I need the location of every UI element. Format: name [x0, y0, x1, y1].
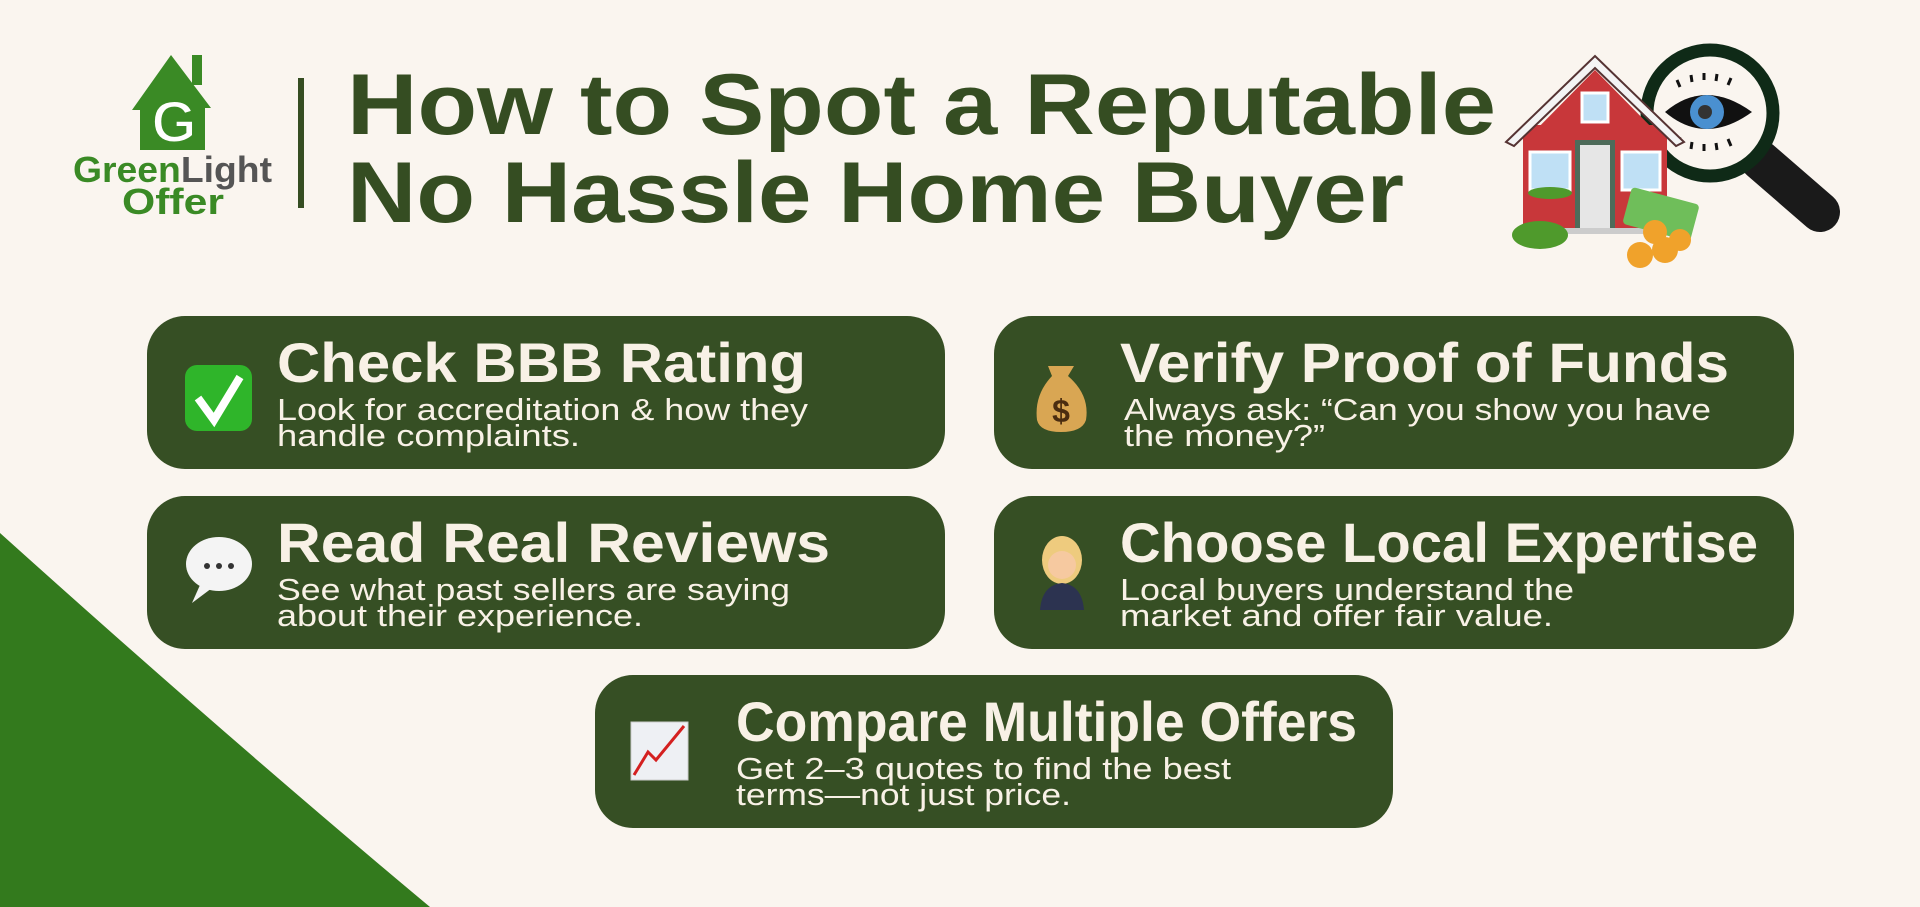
icon: woman: [1040, 536, 1084, 610]
title: How to Spot a Reputable: [347, 57, 1496, 153]
logo: GreenLight: [73, 149, 272, 190]
card: Compare Multiple Offers: Get 2–3 quotes to find the best: [736, 751, 1231, 786]
logo: Offer: [122, 181, 224, 222]
icon: money bag: $: [1052, 393, 1070, 429]
card: Check BBB Rating: Check BBB Rating: [277, 331, 806, 394]
card: Choose Local Expertise: Local buyers understand the: [1120, 572, 1574, 607]
card: Check BBB Rating: handle complaints.: [277, 418, 580, 453]
card: Read Real Reviews: about their experience.: [277, 598, 643, 633]
title: [347, 57, 1496, 241]
illustration: house with magnifier and money: [1506, 50, 1820, 268]
card: Verify Proof of Funds: [994, 316, 1794, 469]
icon: money bag: [1037, 366, 1087, 432]
logo: [73, 55, 272, 222]
card: Verify Proof of Funds: the money?”: [1124, 418, 1325, 453]
icon: speech bubble: [186, 537, 252, 603]
card: Verify Proof of Funds: Always ask: “Can you show you have: [1124, 392, 1711, 427]
card: Read Real Reviews: Read Real Reviews: [277, 511, 830, 574]
card: Verify Proof of Funds: Verify Proof of Funds: [1120, 331, 1729, 394]
title: No Hassle Home Buyer: [347, 145, 1404, 241]
logo: G: [151, 90, 197, 155]
card: Compare Multiple Offers: Compare Multiple Offers: [736, 690, 1357, 753]
card: Choose Local Expertise: market and offer fair value.: [1120, 598, 1553, 633]
card: Choose Local Expertise: Choose Local Expertise: [1120, 511, 1758, 574]
card: Read Real Reviews: [147, 496, 945, 649]
card: Read Real Reviews: See what past sellers are saying: [277, 572, 790, 607]
icon: chart: [631, 722, 688, 780]
card: Check BBB Rating: Look for accreditation & how they: [277, 392, 809, 427]
green curve decoration: [0, 533, 430, 907]
card: Compare Multiple Offers: [595, 675, 1393, 828]
card: Choose Local Expertise: [994, 496, 1794, 649]
card: Check BBB Rating: [147, 316, 945, 469]
card: Compare Multiple Offers: terms—not just price.: [736, 777, 1071, 812]
icon: check box: [185, 365, 252, 431]
